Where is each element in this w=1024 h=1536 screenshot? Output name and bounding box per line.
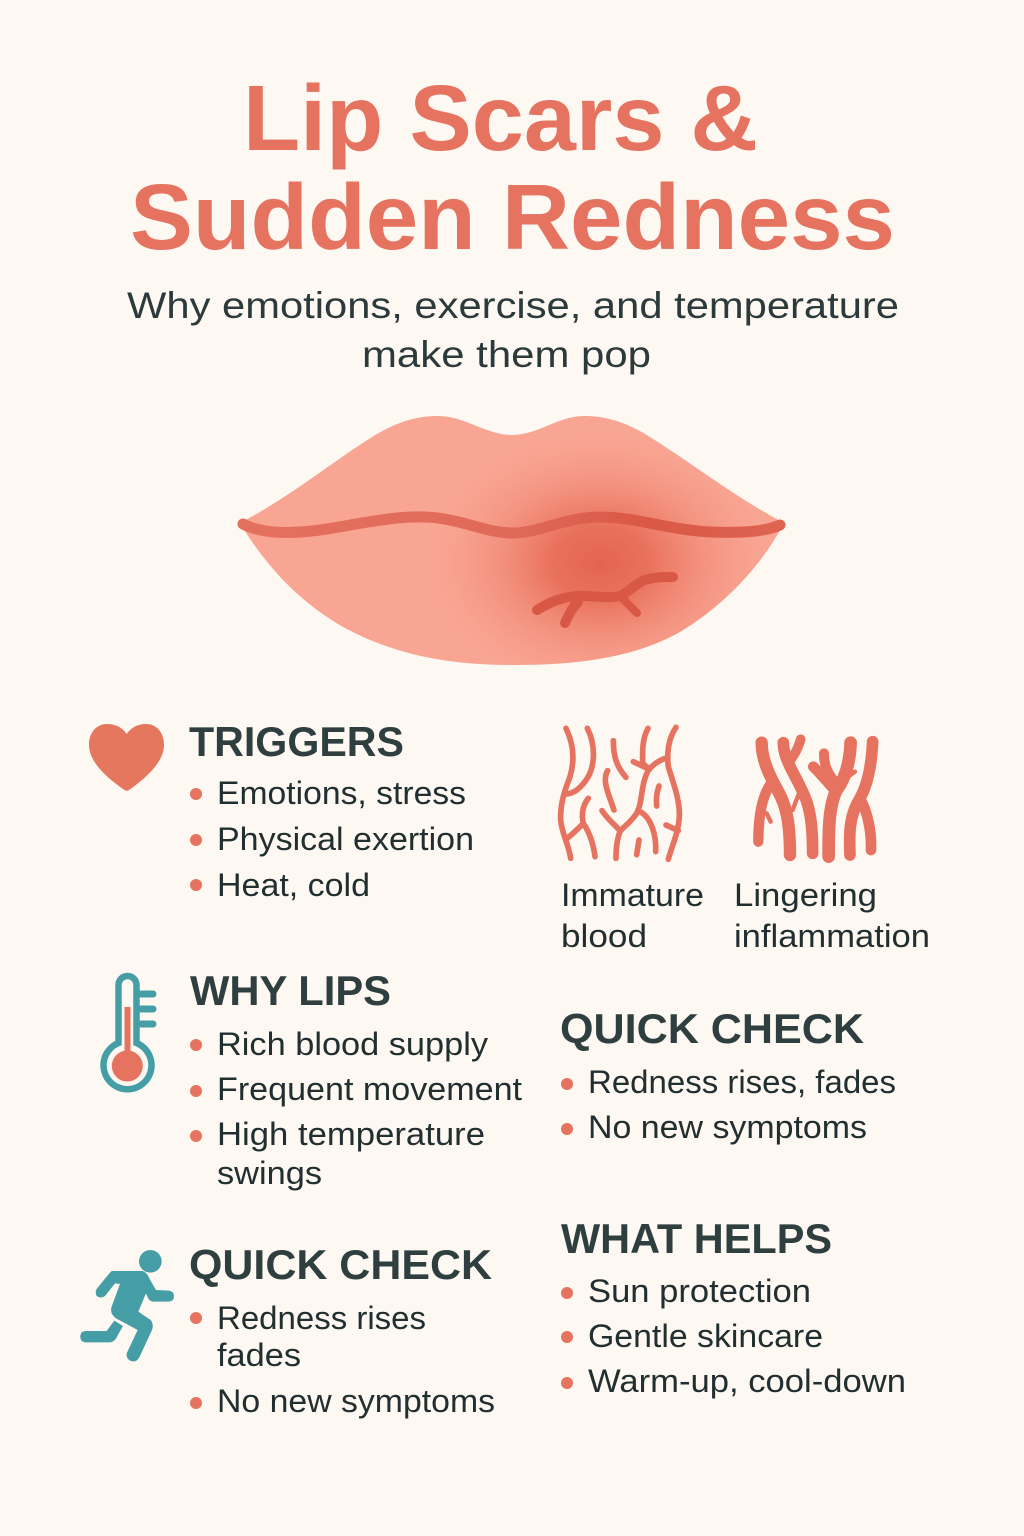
heading: QUICK CHECK [189, 1241, 492, 1288]
panel: triggers [89, 718, 474, 903]
bullet list [561, 1273, 906, 1399]
bullet list: Emotions, stress [217, 775, 466, 811]
label: Lingering [734, 877, 877, 913]
panel: quick check left [80, 1241, 495, 1419]
label: Immature [561, 877, 704, 913]
bullet list: Frequent movement [217, 1071, 522, 1107]
bullet list [190, 1300, 495, 1419]
subtitle: make them pop [362, 334, 651, 375]
bullet list [190, 1026, 522, 1191]
bullet list: Redness rises, fades [588, 1064, 896, 1100]
panel: what helps [561, 1215, 906, 1399]
bullet list: No new symptoms [588, 1109, 867, 1145]
label: blood [561, 918, 647, 954]
bullet list: swings [217, 1155, 322, 1191]
heading: TRIGGERS [189, 718, 404, 765]
bullet list: Gentle skincare [588, 1318, 823, 1354]
icon: runner [80, 1250, 174, 1361]
bullet list: Sun protection [588, 1273, 811, 1309]
lips illustration [240, 416, 800, 670]
bullet list [561, 1064, 896, 1145]
icon: thin vessels [561, 727, 679, 859]
redness patch [467, 461, 732, 663]
title: Sudden Redness [130, 165, 895, 269]
panel: quick check right [560, 1005, 896, 1145]
bullet list: Redness rises [217, 1300, 426, 1336]
bullet list: No new symptoms [217, 1383, 495, 1419]
bullet list: fades [217, 1337, 301, 1373]
panel: lingering inflammation [734, 739, 930, 954]
heading: WHAT HELPS [561, 1215, 832, 1262]
mouth line [243, 517, 780, 533]
bullet list: Heat, cold [217, 867, 370, 903]
panel: why lips [104, 967, 522, 1191]
scar [537, 577, 673, 623]
icon: thick vessels [758, 739, 873, 857]
lip shape [240, 416, 784, 665]
icon: thermometer [104, 976, 153, 1089]
bullet list: Rich blood supply [217, 1026, 488, 1062]
subtitle: Why emotions, exercise, and temperature [127, 285, 899, 326]
bullet list: High temperature [217, 1116, 485, 1152]
panel: immature blood vessels [561, 727, 704, 954]
label [734, 877, 930, 954]
bullet list [190, 775, 474, 903]
title [130, 66, 895, 269]
icon: heart [89, 724, 164, 791]
subtitle [127, 285, 899, 375]
bullet list: Physical exertion [217, 821, 474, 857]
label: inflammation [734, 918, 930, 954]
heading: QUICK CHECK [560, 1005, 864, 1052]
bullet list: Warm-up, cool-down [588, 1363, 906, 1399]
title: Lip Scars & [243, 66, 758, 170]
heading: WHY LIPS [190, 967, 391, 1014]
label [561, 877, 704, 954]
